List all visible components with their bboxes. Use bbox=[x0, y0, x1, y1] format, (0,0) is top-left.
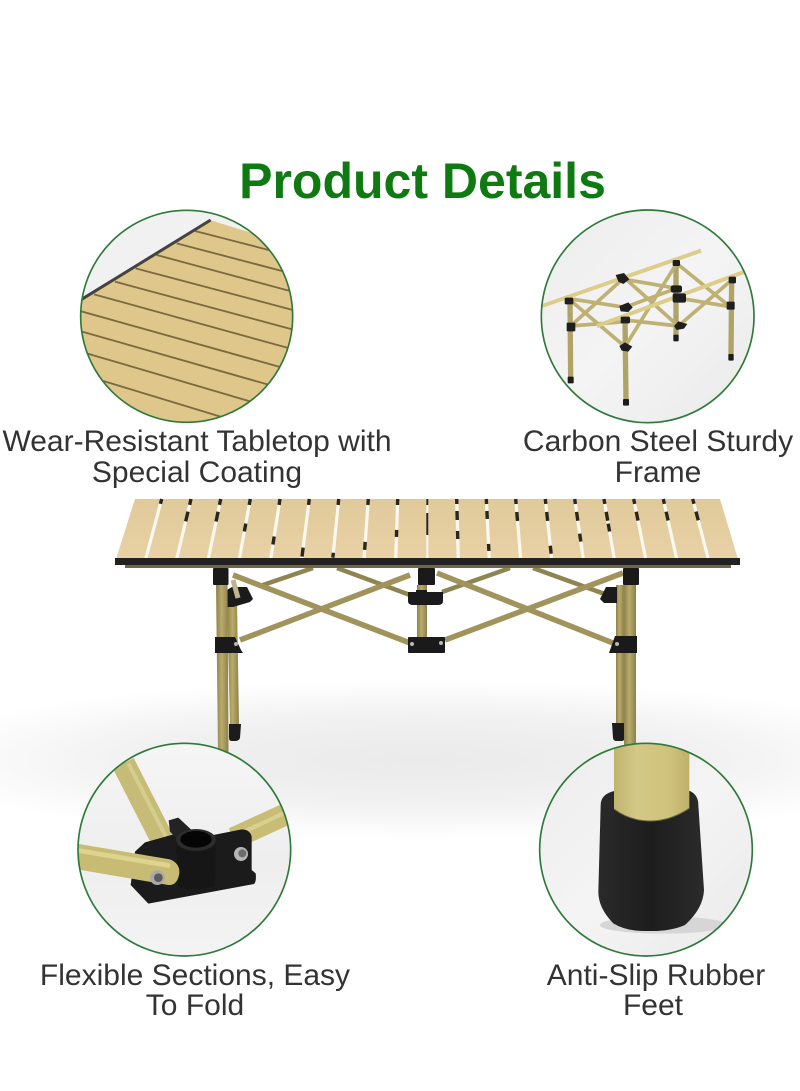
clamp bolts bbox=[234, 641, 619, 646]
label: tabletop: Special Coating bbox=[92, 456, 302, 489]
circle outline bbox=[541, 210, 754, 423]
circle outline bbox=[81, 210, 293, 422]
cylinder hole bbox=[180, 831, 212, 848]
front clamps bbox=[213, 568, 639, 653]
floor shadow bbox=[0, 680, 800, 840]
dark slat edge bbox=[82, 220, 211, 299]
rear cross bars bbox=[260, 568, 613, 597]
detail background bbox=[540, 804, 752, 955]
main folding table bbox=[115, 499, 740, 752]
detail background bbox=[79, 750, 290, 955]
feet bbox=[568, 335, 734, 406]
rubber cup bbox=[598, 791, 704, 931]
rear brackets bbox=[227, 587, 617, 607]
foot shadow bbox=[600, 918, 722, 934]
tube rim shadow bbox=[614, 808, 689, 821]
label: tabletop: Wear-Resistant Tabletop with bbox=[2, 425, 392, 458]
front cross bars bbox=[233, 573, 623, 647]
slat gaps bbox=[146, 499, 708, 559]
tabletop slats bbox=[116, 499, 738, 559]
panel: rubber foot detail bbox=[538, 742, 754, 957]
spring detail bbox=[233, 580, 238, 598]
upper tube bbox=[123, 763, 165, 845]
label: sections: To Fold bbox=[146, 989, 244, 1022]
front tube bbox=[75, 843, 179, 885]
bolt right bbox=[234, 847, 248, 861]
label: feet: Feet bbox=[623, 989, 684, 1022]
title: Product Details bbox=[239, 153, 606, 209]
label: frame: Frame bbox=[615, 456, 701, 489]
tube bbox=[614, 744, 690, 820]
cross bars bbox=[570, 263, 732, 347]
top rails bbox=[540, 251, 745, 326]
bolt left bbox=[150, 870, 165, 885]
circle outline bbox=[78, 743, 291, 956]
legs bbox=[570, 263, 732, 400]
right tube bbox=[233, 812, 290, 838]
front legs bbox=[216, 584, 636, 752]
panel: tabletop detail bbox=[80, 210, 294, 424]
detail background bbox=[542, 211, 753, 422]
tabletop underside rail bbox=[125, 565, 731, 568]
tan slats bbox=[82, 220, 292, 422]
rear feet bbox=[229, 723, 624, 741]
tabletop edge bbox=[115, 558, 740, 565]
bracket cylinder bbox=[204, 830, 214, 835]
bracket plate bbox=[131, 829, 256, 904]
label: feet: Anti-Slip Rubber bbox=[547, 959, 765, 992]
label: frame: Carbon Steel Sturdy bbox=[523, 425, 793, 458]
bracket fin bbox=[168, 818, 191, 834]
panel: frame detail bbox=[540, 209, 755, 424]
circle outline bbox=[540, 743, 752, 956]
slat lines bbox=[80, 231, 294, 417]
cylinder rim bbox=[176, 829, 216, 851]
connectors bbox=[565, 260, 736, 352]
detail background bbox=[84, 211, 249, 296]
rear legs bbox=[227, 585, 624, 724]
panel: hinge detail bbox=[77, 742, 292, 957]
label: sections: Flexible Sections, Easy bbox=[40, 959, 350, 992]
